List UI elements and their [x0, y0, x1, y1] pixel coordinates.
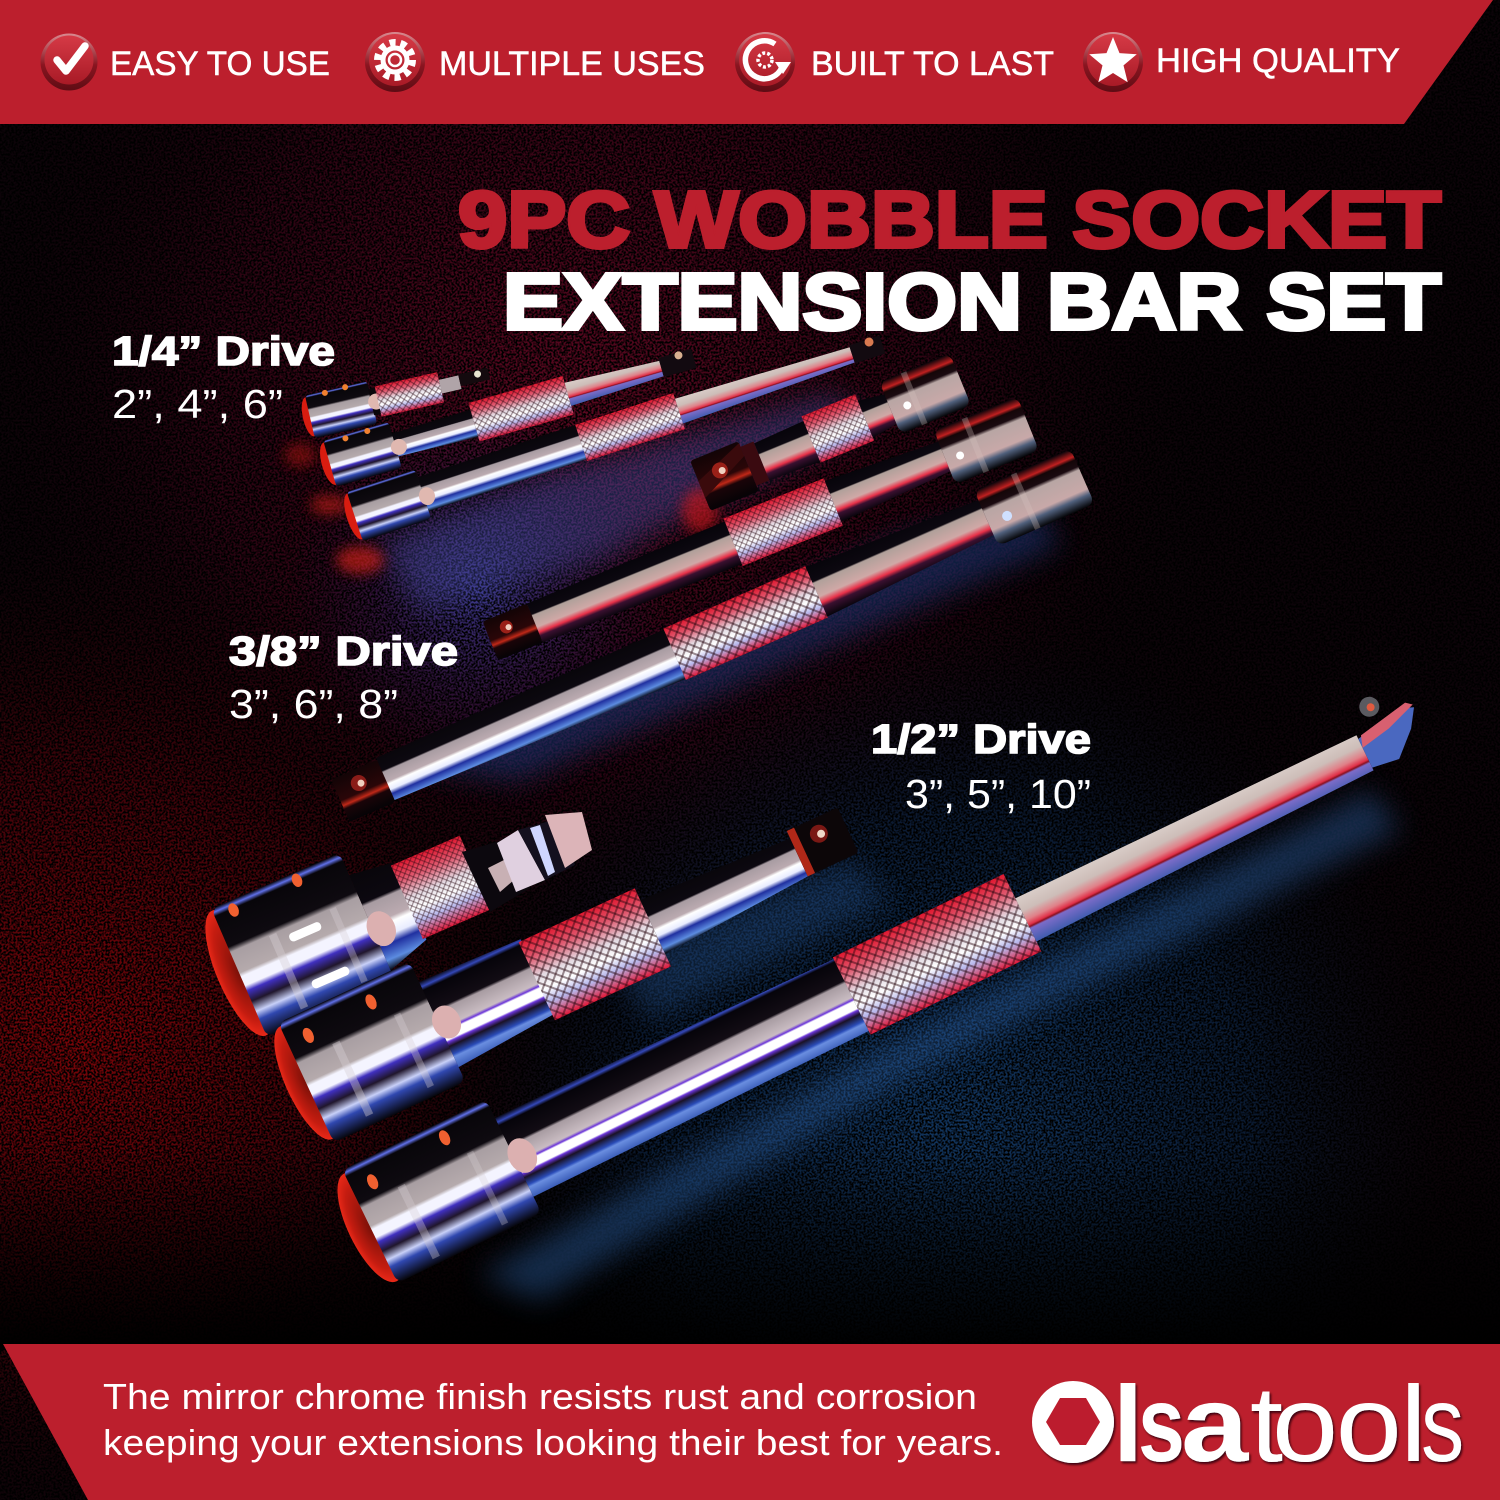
- feature: multiple uses: [365, 32, 705, 92]
- feature: built to last: [735, 32, 1054, 92]
- socket extension 1/4 inch 2 inch: [298, 352, 494, 440]
- label: quarter inch drive: 1/4” Drive: [112, 328, 335, 374]
- finish description: keeping your extensions looking their best for years.: [103, 1422, 1003, 1463]
- logo: Olsatools: s: [1138, 1363, 1185, 1484]
- top feature banner: [0, 0, 1493, 124]
- feature: high quality: HIGH QUALITY: [1156, 42, 1400, 80]
- socket extension 3/8 inch 6 inch: [480, 397, 1039, 668]
- logo: Olsatools: s: [1421, 1363, 1464, 1484]
- logo: Olsatools: l: [1113, 1363, 1143, 1484]
- floor reflections: [284, 395, 1400, 1300]
- label: quarter inch drive: 2”, 4”, 6”: [112, 381, 283, 427]
- logo: Olsatools: a: [1181, 1364, 1250, 1485]
- finish description: [103, 1376, 1003, 1463]
- logo: Olsatools: tool: [1250, 1364, 1427, 1485]
- socket extension 1/2 inch 5 inch: [260, 771, 876, 1151]
- finish description: The mirror chrome finish resists rust and corrosion: [103, 1376, 977, 1417]
- socket extension 3/8 inch 8 inch: [329, 449, 1095, 829]
- label: half inch drive: 1/2” Drive: [871, 716, 1091, 762]
- socket extension 1/2 inch 10 inch: [323, 659, 1446, 1293]
- bottom banner: [3, 1344, 1500, 1500]
- feature: easy to use: EASY TO USE: [110, 45, 330, 83]
- title: [458, 175, 1441, 346]
- socket extension 1/2 inch 3 inch: [191, 806, 592, 1046]
- feature: high quality: [1083, 32, 1400, 92]
- socket extension 1/4 inch 4 inch: [316, 336, 701, 489]
- label: three eighths inch drive: [229, 628, 458, 727]
- title: EXTENSION BAR SET: [503, 257, 1441, 346]
- label: three eighths inch drive: 3”, 6”, 8”: [229, 681, 398, 727]
- feature: easy to use: [40, 34, 330, 90]
- label: half inch drive: 3”, 5”, 10”: [905, 771, 1091, 817]
- socket extension 3/8 inch 3 inch: [690, 353, 971, 512]
- feature: built to last: BUILT TO LAST: [811, 45, 1054, 83]
- socket extension 1/4 inch 6 inch: [339, 320, 891, 544]
- label: half inch drive: [871, 716, 1091, 817]
- feature: multiple uses: MULTIPLE USES: [439, 45, 705, 83]
- logo: Olsatools: [1032, 1363, 1464, 1485]
- universal joint head: [462, 812, 592, 912]
- label: three eighths inch drive: 3/8” Drive: [229, 628, 458, 674]
- label: quarter inch drive: [112, 328, 335, 427]
- title: 9PC WOBBLE SOCKET: [458, 175, 1441, 264]
